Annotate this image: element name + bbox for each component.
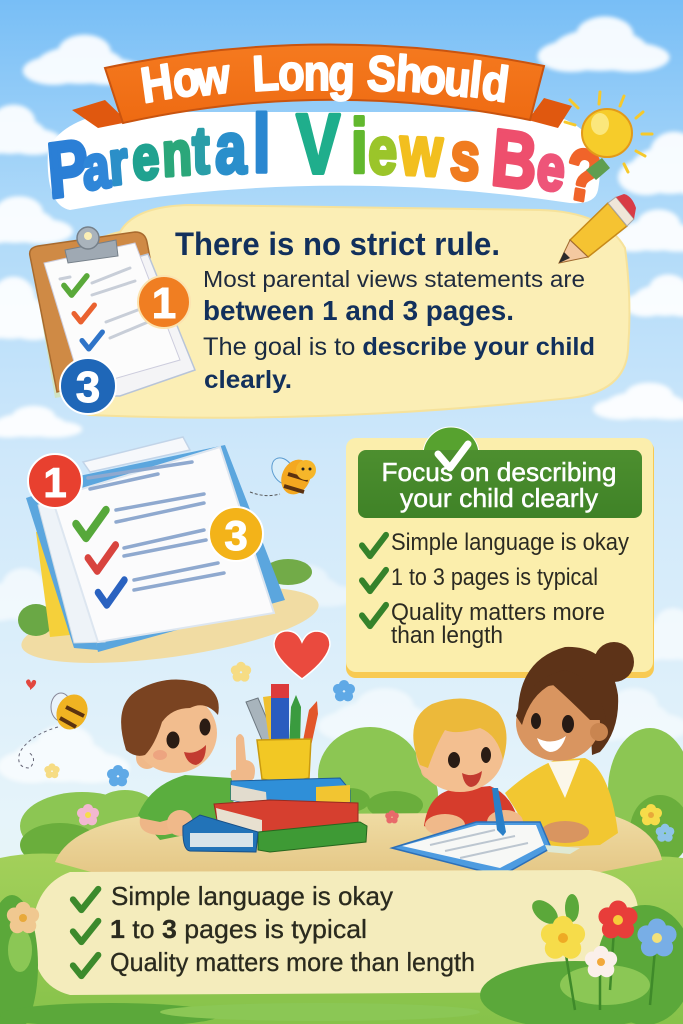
panel background: [346, 440, 654, 678]
checklist: Simple language is okay: [111, 881, 393, 911]
title line 2: e: [368, 113, 398, 188]
badge 1: [28, 454, 82, 508]
title ribbon: [72, 44, 572, 128]
title line 2: e: [130, 122, 161, 193]
panel background: [64, 205, 629, 418]
checklist: Quality matters more: [391, 599, 605, 626]
blond boy: [413, 699, 523, 840]
title line 2: ?: [561, 132, 606, 219]
red book: [214, 800, 358, 834]
badge 1: [138, 276, 190, 328]
icon: green check badge: [423, 427, 479, 483]
cup: [257, 739, 311, 781]
title line 2: P: [44, 123, 92, 215]
checklist: than length: [391, 622, 503, 649]
blue book: [231, 778, 350, 807]
panel background: [32, 870, 638, 995]
badge 3: [60, 358, 116, 414]
title line 2: w: [398, 112, 444, 192]
title line 2: a: [80, 131, 113, 203]
checklist: Simple language is okay: [391, 529, 629, 556]
title line 1: g: [328, 45, 367, 101]
badge 3: 3: [76, 363, 100, 412]
checklist: [73, 881, 475, 977]
green book: [258, 822, 367, 852]
icon: bee top: [250, 454, 316, 499]
checklist: 1 to 3 pages is typical: [391, 564, 598, 591]
title: [44, 44, 606, 219]
title line 1: h: [394, 45, 424, 103]
badge 1: 1: [43, 459, 67, 506]
panel: focus: [346, 427, 654, 678]
title line 2: e: [534, 131, 569, 206]
foreground flowers and grass: [0, 804, 683, 1024]
panel: no strict rule: [64, 205, 629, 418]
small blue book: [183, 815, 258, 852]
icon: bee bottom: [19, 689, 93, 768]
title line 2: a: [215, 108, 247, 189]
icon: pencil: [559, 194, 636, 263]
title line 2: B: [488, 113, 540, 208]
boy in green: [121, 680, 255, 840]
title line 2: i: [351, 104, 367, 189]
header text: Focus on describing: [382, 457, 616, 487]
title line 1: H: [137, 53, 176, 114]
decorative stars: [26, 662, 355, 786]
icon: heart: [274, 631, 330, 679]
panel: bottom checklist: [32, 870, 638, 995]
text: clearly: clearly.: [204, 366, 292, 394]
title line 1: n: [304, 45, 330, 101]
icon: clipboard with badges: [30, 227, 195, 414]
pencils: [246, 684, 318, 747]
text: most statements: Most parental views statements are: [203, 266, 585, 292]
text: goal: The goal is to describe your child: [203, 333, 595, 361]
title line 1: w: [192, 47, 244, 107]
title line 1: S: [366, 45, 397, 102]
header text: your child clearly: [400, 483, 598, 513]
title line 1: o: [169, 49, 202, 109]
title line 1: d: [479, 54, 512, 113]
title line 1: o: [278, 45, 305, 101]
heading: no strict rule: There is no strict rule.: [175, 226, 500, 262]
title line 1: o: [418, 47, 448, 105]
badge 3: 3: [224, 512, 248, 559]
mother: [505, 642, 634, 848]
badge 3: [209, 507, 263, 561]
badge 1: 1: [152, 279, 176, 328]
title line 2: V: [296, 97, 340, 191]
sand mound: [55, 812, 662, 880]
panel header: [358, 450, 642, 518]
open notebook with pen: [392, 788, 580, 876]
title line 2: s: [448, 117, 497, 195]
title line 2: t: [192, 112, 210, 187]
title white backing: [48, 112, 600, 210]
checklist: Quality matters more than length: [110, 947, 475, 977]
icon: lightbulb: [565, 92, 652, 180]
title line 2: r: [106, 127, 131, 198]
title line 2: n: [161, 118, 193, 189]
title line 1: l: [467, 52, 485, 108]
checklist: [362, 529, 629, 649]
checklist: 1 to 3 pages is typical: [110, 914, 367, 944]
title line 2: l: [253, 97, 288, 190]
icon: document stack on sand: [17, 437, 323, 678]
title line 1: L: [251, 45, 280, 102]
book stack with pencil cup: [183, 684, 367, 852]
text: page range: between 1 and 3 pages.: [203, 295, 514, 326]
background foliage and hills: [0, 727, 683, 1024]
title line 1: u: [442, 49, 473, 108]
